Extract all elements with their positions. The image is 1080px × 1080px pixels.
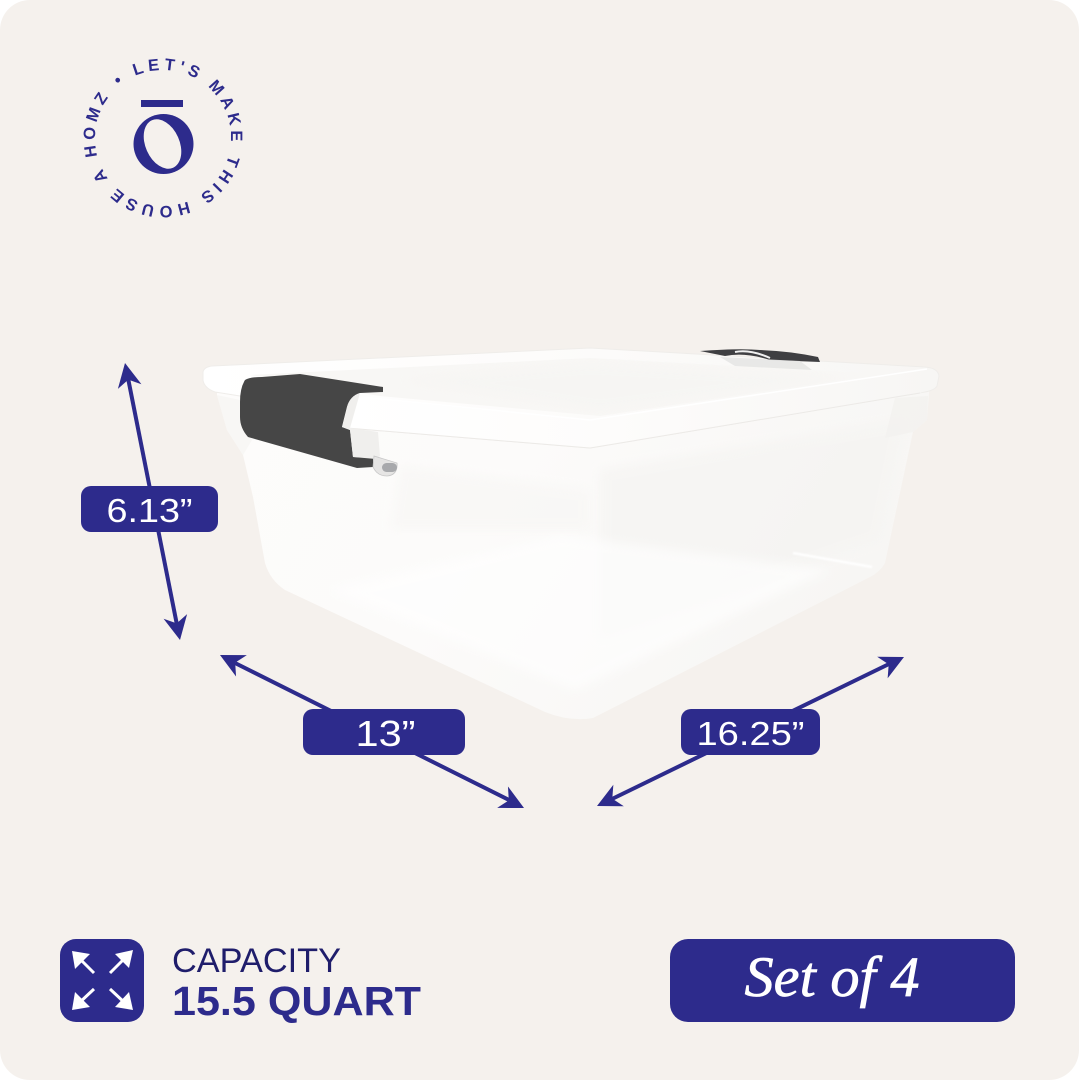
rear latch — [700, 349, 820, 370]
icon: letter o with macron — [134, 100, 194, 175]
dimension: width 13 inches — [215, 644, 529, 819]
icon: capacity expand arrows — [60, 939, 144, 1022]
capacity value: 15.5 QUART — [172, 978, 421, 1024]
box lid rim — [203, 348, 939, 448]
arrow: width — [215, 644, 529, 819]
capacity text — [172, 942, 421, 1024]
set of 4 badge: Set of 4 — [744, 946, 920, 1009]
dimension: length 16.25 inches — [592, 646, 909, 817]
label: 6.13: 6.13” — [106, 492, 192, 529]
dimension: height 6.13 inches — [81, 361, 218, 642]
label: 13: 13” — [356, 713, 416, 754]
capacity heading: CAPACITY — [172, 942, 341, 980]
circular slogan text: • LET'S MAKE THIS HOUSE A HOMZ — [84, 58, 242, 218]
arrow: length — [592, 646, 909, 817]
arrow: height — [113, 361, 192, 642]
label: 6.13 — [81, 486, 218, 532]
product photo: clear storage box — [203, 348, 939, 719]
brand logo badge — [84, 58, 242, 218]
label: 13 — [303, 709, 465, 755]
label: 16.25: 16.25” — [696, 715, 804, 752]
label: 16.25 — [681, 709, 820, 755]
box body — [217, 380, 930, 719]
front latch — [240, 374, 397, 476]
set of 4 badge — [670, 939, 1015, 1022]
